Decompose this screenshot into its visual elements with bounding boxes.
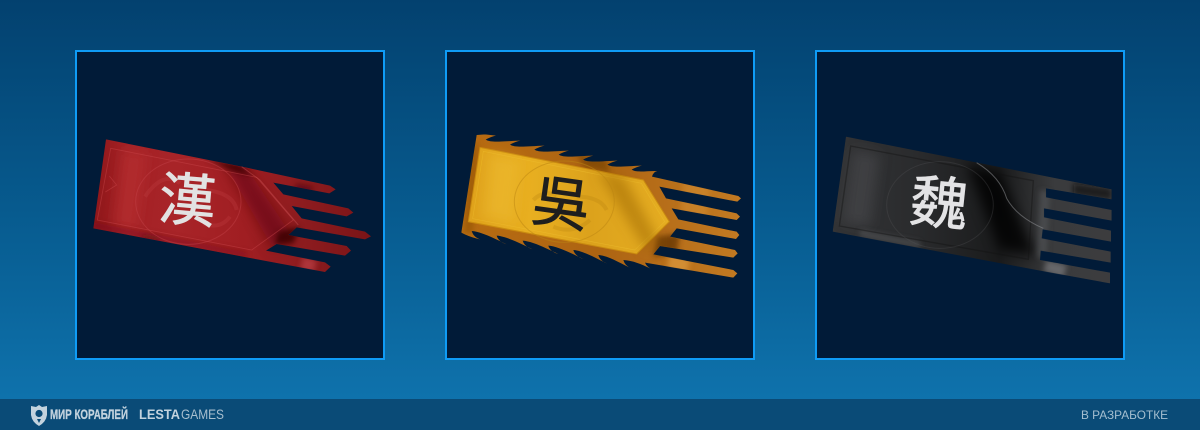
red flag emblem bbox=[136, 159, 241, 244]
panel: yellow flag card bbox=[445, 50, 755, 360]
red flag fold line bbox=[242, 167, 298, 225]
red flag character: 漢 bbox=[156, 151, 220, 240]
panel: red flag card bbox=[75, 50, 385, 360]
black flag border line bbox=[839, 146, 1033, 259]
red flag border line bbox=[97, 148, 293, 250]
black flag character: 魏 bbox=[907, 154, 973, 243]
brand: Lesta Games: GAMES bbox=[181, 407, 224, 422]
brand: Lesta Games: LESTA bbox=[139, 407, 180, 422]
brand: Lesta Games bbox=[139, 407, 224, 422]
yellow flag emblem bbox=[514, 161, 614, 242]
footer bar bbox=[0, 399, 1200, 430]
yellow flag bbox=[461, 134, 1102, 278]
icon: shield logo bbox=[31, 405, 47, 426]
brand: Mir Korabley: МИР КОРАБЛЕЙ bbox=[50, 407, 128, 422]
black flag bbox=[468, 136, 1112, 284]
yellow flag character: 吳 bbox=[528, 153, 597, 244]
status label: В РАЗРАБОТКЕ bbox=[1081, 408, 1168, 422]
black flag fold highlight bbox=[977, 163, 1043, 228]
panel: black flag card bbox=[815, 50, 1125, 360]
red flag bbox=[93, 140, 736, 278]
black flag emblem bbox=[887, 162, 993, 248]
yellow inner field bbox=[468, 147, 669, 254]
